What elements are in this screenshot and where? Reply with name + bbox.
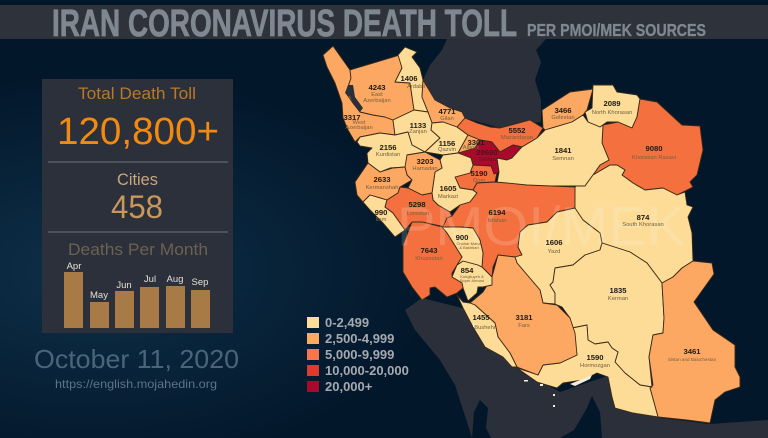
bar chart: deaths per month: Jul (144, 274, 156, 285)
Golestan (542, 89, 593, 130)
East Azerbaijan (346, 55, 414, 120)
legend (307, 315, 409, 394)
province labels: 1156 (439, 139, 455, 148)
province labels: 1606 (545, 238, 563, 247)
bar chart: deaths per month: Apr (67, 261, 81, 272)
Gulf islands (473, 324, 592, 407)
province labels: Lorestan (407, 211, 429, 217)
province labels: 3466 (554, 106, 572, 115)
province labels: Yazd (548, 249, 560, 255)
legend: 2,500-4,999 (325, 331, 394, 346)
province labels: Bushehr (474, 325, 496, 331)
province labels: East (371, 92, 383, 98)
Ardabil (395, 47, 428, 112)
legend: 10,000-20,000 (325, 363, 409, 378)
map of Iran provinces (323, 46, 740, 423)
province labels: Qazvin (438, 147, 456, 153)
heading: cities: Cities (117, 170, 158, 189)
province labels: 3317 (343, 113, 361, 122)
Fars (470, 255, 577, 375)
province labels: 2156 (379, 143, 397, 152)
province labels: 1455 (472, 313, 490, 322)
Semnan (497, 115, 609, 186)
province labels: Qom (473, 178, 485, 184)
province labels: 2633 (373, 175, 391, 184)
province labels: 7643 (420, 246, 438, 255)
Ilam (363, 195, 405, 237)
province labels: 5298 (408, 200, 426, 209)
Qom (455, 165, 497, 190)
province labels: Khuzestan (415, 256, 443, 262)
province labels: West (352, 120, 366, 126)
province labels: 3301 (467, 138, 485, 147)
province labels: Zanjan (409, 129, 427, 135)
North Khorasan (585, 85, 640, 128)
legend: 0-2,499 (325, 315, 369, 330)
sea: Persian Gulf and Gulf of Oman (405, 298, 768, 438)
province labels: Isfahan (487, 218, 507, 224)
West Azerbaijan (323, 46, 395, 142)
province labels (343, 74, 717, 369)
bar chart: deaths per month: Aug (167, 274, 183, 285)
province labels: 5552 (508, 126, 526, 135)
province labels: Golestan (551, 115, 575, 121)
province labels: 3181 (515, 313, 533, 322)
province labels: Kohgiluyeh & (460, 274, 484, 279)
Sistan and Baluchestan (649, 261, 740, 423)
Hamadan (405, 152, 442, 195)
province labels: 3203 (416, 157, 434, 166)
Lake Urmia (345, 85, 363, 112)
Khorasan Razavi (593, 99, 703, 195)
province labels: Gilan (440, 116, 454, 122)
province labels: 990 (375, 208, 387, 217)
province labels: 3461 (683, 347, 701, 356)
Lorestan (385, 187, 452, 230)
province labels: 900 (456, 233, 468, 242)
subtitle: PER PMOI/MEK SOURCES (527, 20, 706, 40)
heading: total death toll: Total Death Toll (78, 84, 196, 103)
Chaharmahal and Bakhtiari (442, 227, 483, 267)
province labels: Alborz (463, 145, 479, 151)
province labels: 9080 (645, 144, 663, 153)
province labels: 854 (461, 266, 474, 275)
heading: deaths per month: Deaths Per Month (68, 240, 208, 259)
province labels: Azerbaijan (345, 125, 373, 131)
province labels: Chahar Mahal (456, 241, 482, 246)
province labels: Boyer Ahmad (460, 278, 484, 283)
panel: statistics (42, 79, 233, 333)
province labels: North Khorasan (592, 110, 632, 116)
South Khorasan (574, 165, 693, 283)
bar chart: deaths per month (64, 261, 210, 328)
bar chart: deaths per month: May (90, 290, 108, 301)
province labels: 5190 (470, 169, 488, 178)
bar chart: deaths per month: Sep (192, 277, 208, 288)
title: IRAN CORONAVIRUS DEATH TOLL (52, 3, 517, 45)
province labels: 1406 (400, 74, 418, 83)
province labels: Azerbaijan (363, 98, 391, 104)
legend: 5,000-9,999 (325, 347, 394, 362)
province labels: Semnan (552, 156, 574, 162)
Khuzestan (403, 222, 463, 300)
province labels: Kermanshah (366, 185, 398, 191)
watermark: PMOI/MEK (397, 195, 685, 257)
Isfahan (443, 182, 575, 277)
Alborz (458, 135, 487, 153)
Markazi (432, 153, 477, 212)
province labels: & Bakhtiari (459, 245, 479, 250)
Kohgiluyeh and Boyer-Ahmad (452, 261, 492, 301)
Bushehr (457, 295, 517, 367)
Tehran (458, 140, 522, 174)
province labels: Ilam (376, 217, 387, 223)
Mazandaran (457, 118, 543, 152)
Yazd (515, 208, 602, 304)
province labels: 4771 (438, 107, 456, 116)
province labels: Khorasan Razavi (632, 155, 676, 161)
province labels: 1605 (439, 184, 457, 193)
number: total deaths: 120,800+ (57, 111, 219, 153)
province labels: Hamadan (412, 166, 438, 172)
Kurdistan (357, 132, 425, 172)
province labels: 1835 (609, 286, 627, 295)
province labels: Ardabil (407, 84, 425, 90)
province labels: Fars (518, 323, 530, 329)
province labels: Mazandaran (501, 135, 533, 141)
Qazvin (425, 122, 468, 155)
province labels: 1133 (410, 121, 426, 130)
province labels: Hormozgan (580, 363, 610, 369)
province labels: 4243 (368, 83, 386, 92)
legend: 20,000+ (325, 379, 373, 394)
Kermanshah (355, 163, 412, 202)
number: cities: 458 (111, 189, 163, 225)
province labels: 1590 (586, 353, 604, 362)
province labels: 28690 (476, 148, 498, 157)
Gilan (422, 80, 465, 127)
province labels: 6194 (488, 208, 506, 217)
province labels: 1841 (554, 146, 572, 155)
province labels: Tehran (478, 157, 496, 163)
sea: Caspian (423, 39, 546, 128)
province labels: Kerman (608, 296, 628, 302)
province labels: Sistan and Baluchestan (668, 357, 717, 362)
source url: https://english.mojahedin.org (55, 377, 217, 391)
date: October 11, 2020 (34, 344, 239, 374)
Hormozgan (517, 325, 658, 417)
province labels: 874 (637, 213, 650, 222)
province labels: Kurdistan (376, 152, 400, 158)
province labels: Markazi (438, 194, 458, 200)
Kerman (550, 243, 664, 387)
bar chart: deaths per month: Jun (116, 280, 132, 291)
title band (0, 3, 768, 45)
Zanjan (393, 110, 440, 152)
province labels: South Khorasan (622, 222, 664, 228)
province labels: 2089 (603, 99, 621, 108)
